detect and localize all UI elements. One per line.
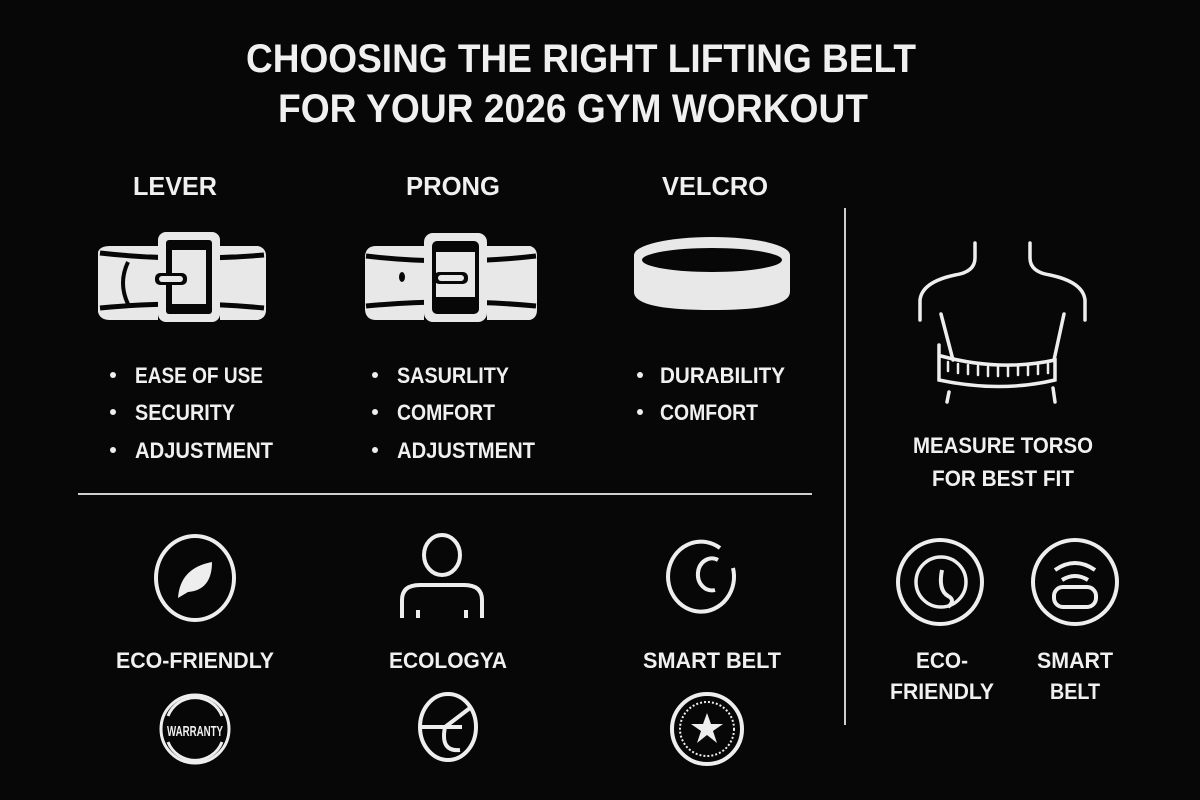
heading: lever: LEVER (133, 171, 217, 201)
badge: warranty (161, 695, 229, 763)
icon: velcro belt (634, 237, 790, 310)
icon: torso measure (920, 243, 1085, 402)
list: prong: ADJUSTMENT (397, 438, 536, 463)
text: measure torso (913, 433, 1093, 491)
heading: prong: PRONG (406, 171, 500, 201)
text: measure torso: MEASURE TORSO (913, 433, 1093, 458)
list: prong: SASURLITY (397, 363, 509, 388)
labels right: FRIENDLY (890, 679, 994, 704)
badge: warranty: WARRANTY (167, 723, 223, 740)
icon: smart belt circle right (1033, 540, 1117, 624)
title (246, 37, 916, 131)
icon: person (402, 535, 482, 618)
list: velcro: COMFORT (660, 400, 758, 425)
icon: lever belt (98, 232, 266, 322)
list: lever: EASE OF USE (135, 363, 263, 388)
list: prong (372, 363, 536, 463)
title: FOR YOUR 2026 GYM WORKOUT (278, 87, 868, 131)
labels right: ECO- (916, 648, 968, 673)
badge: ecologya (420, 694, 476, 760)
icon: leaf circle (156, 536, 234, 620)
labels right: SMART (1037, 648, 1114, 673)
heading: velcro: VELCRO (662, 171, 768, 201)
list: lever: SECURITY (135, 400, 235, 425)
list: prong: COMFORT (397, 400, 495, 425)
labels right (890, 648, 1114, 704)
labels bottom row: SMART BELT (643, 648, 782, 673)
text: measure torso: FOR BEST FIT (932, 466, 1075, 491)
list: lever (110, 363, 274, 463)
labels right: BELT (1050, 679, 1100, 704)
icon: eco circle right (898, 540, 982, 624)
badge: star (672, 694, 742, 764)
labels bottom row (116, 648, 782, 673)
title: CHOOSING THE RIGHT LIFTING BELT (246, 37, 916, 81)
icon: smart circle (668, 542, 734, 612)
labels bottom row: ECOLOGYA (389, 648, 507, 673)
list: velcro: DURABILITY (660, 363, 785, 388)
list: lever: ADJUSTMENT (135, 438, 274, 463)
icon: prong belt (365, 233, 537, 322)
list: velcro (637, 363, 785, 425)
labels bottom row: ECO-FRIENDLY (116, 648, 274, 673)
